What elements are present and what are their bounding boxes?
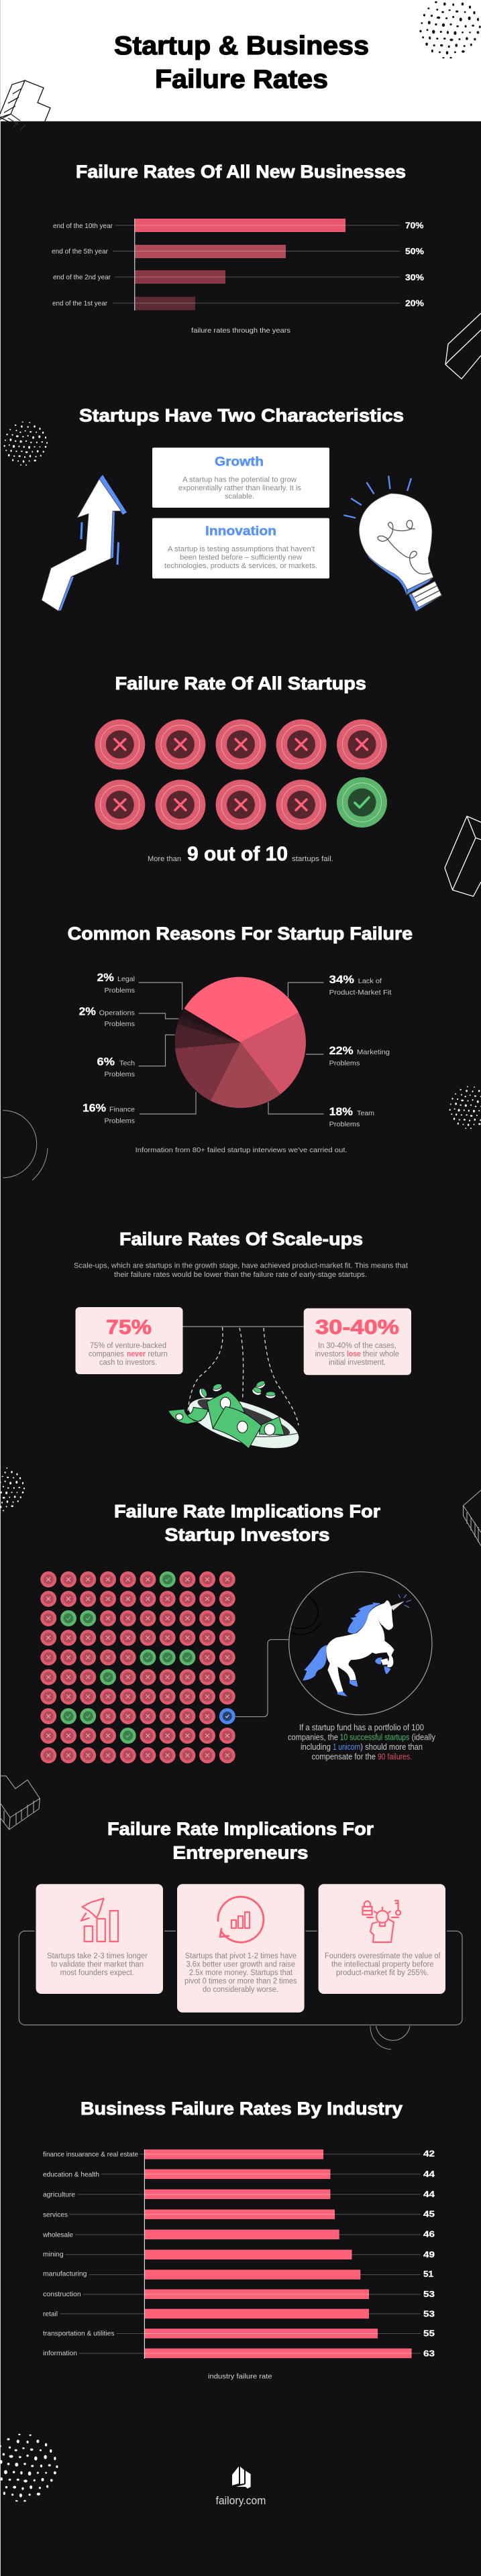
label: 2% operations problems: Operations <box>99 1009 135 1017</box>
heading: failure rates of all new businesses: Failure Rates Of All New Businesses <box>76 162 406 182</box>
label: 2% operations problems <box>79 1006 135 1028</box>
label: 6% tech problems: Problems <box>105 1070 135 1078</box>
label: 2% legal problems: Problems <box>105 987 135 995</box>
bar chart: failure rate by industry: services <box>43 2210 68 2219</box>
bar chart: failure rate by industry: 55 <box>423 2329 435 2338</box>
decoration: white dots bottom left <box>0 2434 58 2502</box>
label: 18% team problems: Problems <box>329 1121 360 1129</box>
decoration: wire cube right <box>445 313 481 379</box>
bar chart: failure rate by industry: 53 <box>423 2310 435 2319</box>
label: 34% lack of product-market fit <box>329 974 392 997</box>
bar chart: failure rates through the years: failure rates through the years <box>191 327 290 335</box>
bar chart: failure rates through the years: end of the 10th year <box>53 222 113 230</box>
panel: growth: Growth <box>215 455 264 469</box>
text: portfolio explanation: 90 failures. <box>378 1752 412 1762</box>
panel: 30-40% stat: In 30-40% of the cases, <box>318 1342 396 1350</box>
icon grid: portfolio of 100 companies <box>40 1571 235 1763</box>
heading: entrepreneurs: Entrepreneurs <box>172 1842 309 1862</box>
card: market validation: Startups take 2-3 times longer <box>47 1952 148 1960</box>
heading: by industry: Business Failure Rates By Industry <box>81 2098 403 2119</box>
bar chart: failure rate by industry: construction <box>43 2290 81 2298</box>
illustration: unicorn in circle <box>289 1572 432 1715</box>
card: pivots: 2.5x more money. Startups that <box>189 1969 293 1977</box>
decoration: arcs under cards <box>370 2026 410 2050</box>
bar chart: failure rate by industry: retail <box>43 2310 58 2318</box>
label: 16% finance problems: 16% <box>83 1103 106 1115</box>
logo: failory <box>216 2467 266 2507</box>
label: 16% finance problems: Problems <box>105 1117 135 1125</box>
panel: 75% stat <box>75 1307 182 1374</box>
label: 34% lack of product-market fit: Lack of <box>358 977 382 985</box>
label: 18% team problems: Team <box>357 1109 374 1117</box>
text: portfolio explanation: companies, the <box>288 1732 338 1742</box>
label: 18% team problems: 18% <box>329 1106 353 1118</box>
callout: 9 out of 10: 9 out of 10 <box>187 843 288 865</box>
panel: innovation: Innovation <box>205 524 276 539</box>
bar chart: failure rate by industry: mining <box>43 2251 64 2259</box>
heading: entrepreneurs: Failure Rate Implications For <box>107 1819 374 1839</box>
label: 34% lack of product-market fit: Product-Market Fit <box>329 989 392 997</box>
white header band <box>0 0 481 121</box>
paragraph: scale-ups intro: Scale-ups, which are startups in the growth stage, have achieved product-market fit. This means that <box>74 1262 408 1270</box>
panel: 30-40% stat <box>304 1308 411 1375</box>
logo: failory: failory.com <box>216 2494 266 2507</box>
paragraph: scale-ups intro: their failure rates would be lower than the failure rate of early-stage startups. <box>114 1271 367 1279</box>
heading: common reasons: Common Reasons For Startup Failure <box>68 923 413 944</box>
card: pivots <box>177 1884 305 2013</box>
bar chart: failure rates through the years <box>52 219 424 335</box>
card: pivots: Startups that pivot 1-2 times have <box>185 1952 297 1960</box>
label: 2% legal problems: Legal <box>117 975 135 983</box>
card: market validation: to validate their market than <box>51 1961 144 1969</box>
callout: 9 out of 10: More than <box>148 855 181 863</box>
bar chart: failure rates through the years: end of the 1st year <box>52 299 107 307</box>
bar chart: failure rate by industry: finance insuarance & real estate <box>43 2150 138 2158</box>
bar chart: failure rate by industry: 42 <box>423 2149 435 2158</box>
label: 16% finance problems <box>83 1103 135 1125</box>
label: 18% team problems <box>329 1106 374 1129</box>
panel: growth: exponentially rather than linearly. It is <box>178 484 302 492</box>
text: portfolio explanation: ) should more than <box>360 1742 423 1752</box>
panel: innovation: technologies, products & services, or markets. <box>164 562 317 570</box>
label: 2% operations problems: Problems <box>105 1020 135 1028</box>
pie chart source note: Information from 80+ failed startup interviews we've carried out. <box>136 1146 348 1154</box>
heading: scale-ups: Failure Rates Of Scale-ups <box>119 1229 363 1249</box>
decoration: wire cube right <box>445 816 481 896</box>
text: portfolio explanation <box>288 1723 436 1762</box>
heading: startup investors: Failure Rate Implications For <box>114 1502 380 1522</box>
pie chart: reasons for failure <box>175 977 306 1108</box>
panel: 75% stat: never <box>127 1351 146 1359</box>
label: 22% marketing problems: Marketing <box>357 1048 390 1056</box>
callout: 9 out of 10: startups fail. <box>292 855 333 863</box>
title <box>114 32 369 94</box>
card: market validation: most founders expect. <box>60 1969 134 1977</box>
panel: growth: A startup has the potential to grow <box>182 476 297 484</box>
bar chart: failure rate by industry: 51 <box>423 2270 433 2279</box>
card: pivots: do considerably worse. <box>203 1986 278 1994</box>
bar chart: failure rates through the years: 70% <box>405 221 424 231</box>
bar chart: failure rates through the years: end of the 2nd year <box>53 274 111 282</box>
decoration: wire cube left <box>0 1776 40 1830</box>
bar chart: failure rate by industry: 44 <box>423 2190 435 2199</box>
panel: 30-40% stat: investors <box>315 1351 345 1359</box>
label: 34% lack of product-market fit: 34% <box>329 974 354 986</box>
bar chart: failure rate by industry: 53 <box>423 2290 435 2299</box>
bar chart: failure rate by industry: manufacturing <box>43 2270 87 2278</box>
decoration: white dots left <box>3 422 48 465</box>
label: 22% marketing problems <box>329 1045 390 1068</box>
panel: 75% stat: cash to investors. <box>99 1359 157 1367</box>
label: 6% tech problems: 6% <box>97 1056 115 1068</box>
bar chart: failure rate by industry: 44 <box>423 2170 435 2179</box>
label: 6% tech problems: Tech <box>119 1060 135 1068</box>
panel: innovation: A startup is testing assumptions that haven't <box>168 545 315 553</box>
panel: growth: scalable. <box>225 493 254 501</box>
line linking the two stat cards <box>182 1326 304 1327</box>
panel: 30-40% stat: initial investment. <box>329 1359 386 1367</box>
label: 2% operations problems: 2% <box>79 1006 96 1018</box>
label: 22% marketing problems: 22% <box>329 1045 354 1057</box>
label: 2% legal problems <box>97 972 135 995</box>
bar chart: failure rate by industry: education & health <box>43 2170 99 2178</box>
heading: failure rate of all startups: Failure Rate Of All Startups <box>115 673 366 693</box>
label: 6% tech problems <box>97 1056 135 1078</box>
panel: 30-40% stat: lose <box>347 1351 361 1359</box>
bar chart: failure rate by industry: transportation & utilities <box>43 2330 114 2338</box>
leader lines for pie chart <box>139 983 323 1114</box>
dashed strings holding the money plate <box>188 1327 299 1425</box>
bar chart: failure rates through the years: 30% <box>405 273 424 282</box>
outline behind entrepreneur cards <box>19 1931 462 2025</box>
heading: entrepreneurs <box>107 1819 374 1862</box>
decoration: arcs left <box>3 1111 48 1180</box>
icon: rocket and bars <box>81 1899 118 1942</box>
card: intellectual property: Founders overestimate the value of <box>325 1952 441 1960</box>
card: intellectual property: the intellectual property before <box>331 1961 434 1969</box>
label: 2% legal problems: 2% <box>97 972 114 984</box>
callout: 9 out of 10 <box>148 843 333 865</box>
decoration: black dots top right <box>419 0 481 58</box>
connector from blue dot to unicorn <box>235 1640 288 1717</box>
panel: 30-40% stat: their whole <box>363 1351 399 1359</box>
bar chart: failure rates through the years: 20% <box>405 299 424 309</box>
label: 22% marketing problems: Problems <box>329 1060 360 1068</box>
icon: head with bulb, lock and key <box>362 1901 400 1942</box>
decoration: white dots left <box>0 1467 25 1511</box>
card: pivots: 3.6x better user growth and raise <box>186 1961 295 1969</box>
title: Startup & Business <box>114 32 369 60</box>
bar chart: failure rate by industry: information <box>43 2349 77 2357</box>
heading: two characteristics: Startups Have Two Characteristics <box>79 406 404 426</box>
icon: growth arrow <box>42 475 127 611</box>
bar chart: failure rate by industry: industry failure rate <box>208 2373 272 2381</box>
bar chart: failure rate by industry: 49 <box>423 2250 435 2259</box>
decoration: hatched cube top left <box>0 80 50 133</box>
bar chart: failure rate by industry: 63 <box>423 2349 435 2358</box>
bar chart: failure rate by industry: 45 <box>423 2209 435 2219</box>
card: market validation <box>36 1884 163 1994</box>
text: portfolio explanation: including <box>301 1742 331 1752</box>
text: portfolio explanation: If a startup fund has a portfolio of 100 <box>299 1723 424 1732</box>
text: portfolio explanation: 1 unicorn <box>333 1742 360 1752</box>
text: portfolio explanation: 10 successful startups <box>340 1732 409 1742</box>
text: portfolio explanation: (ideally <box>412 1732 436 1742</box>
panel: 75% stat: companies <box>89 1351 124 1359</box>
paragraph: scale-ups intro <box>74 1262 408 1279</box>
bar chart: failure rate by industry: 46 <box>423 2229 435 2239</box>
title: Failure Rates <box>155 65 328 94</box>
card: pivots: pivot 0 times or more than 2 times <box>184 1978 297 1986</box>
illustration: plate of money <box>168 1380 304 1459</box>
icon grid: 9 failures and 1 success <box>95 719 387 830</box>
card: intellectual property <box>319 1884 445 1994</box>
bar chart: failure rate by industry <box>42 2149 435 2381</box>
card: intellectual property: product-market fit by 255%. <box>336 1969 429 1977</box>
panel: growth <box>152 448 329 508</box>
panel: 75% stat: 75% of venture-backed <box>90 1342 166 1350</box>
bar chart: failure rates through the years: end of the 5th year <box>52 247 108 256</box>
panel: 75% stat: return <box>148 1351 168 1359</box>
panel: 30-40% stat: 30-40% <box>315 1315 399 1339</box>
label: 16% finance problems: Finance <box>109 1106 135 1114</box>
heading: startup investors: Startup Investors <box>165 1525 330 1545</box>
bar chart: failure rate by industry: agriculture <box>43 2190 75 2198</box>
icon: pivot cycle with bars <box>218 1897 264 1942</box>
panel: innovation <box>152 518 329 578</box>
icon: failory book mark <box>232 2467 251 2489</box>
panel: innovation: been tested before – sufficiently new <box>180 554 302 562</box>
heading: startup investors <box>114 1502 380 1545</box>
bar chart: failure rates through the years: 50% <box>405 247 424 256</box>
bar chart: failure rate by industry: wholesale <box>42 2231 73 2239</box>
text: portfolio explanation: compensate for the <box>312 1752 376 1762</box>
decoration: white dots right <box>449 1086 481 1129</box>
icon: light bulb <box>344 476 442 612</box>
decoration: hatched wire cube right <box>463 1490 481 1546</box>
panel: 75% stat: 75% <box>106 1315 152 1339</box>
